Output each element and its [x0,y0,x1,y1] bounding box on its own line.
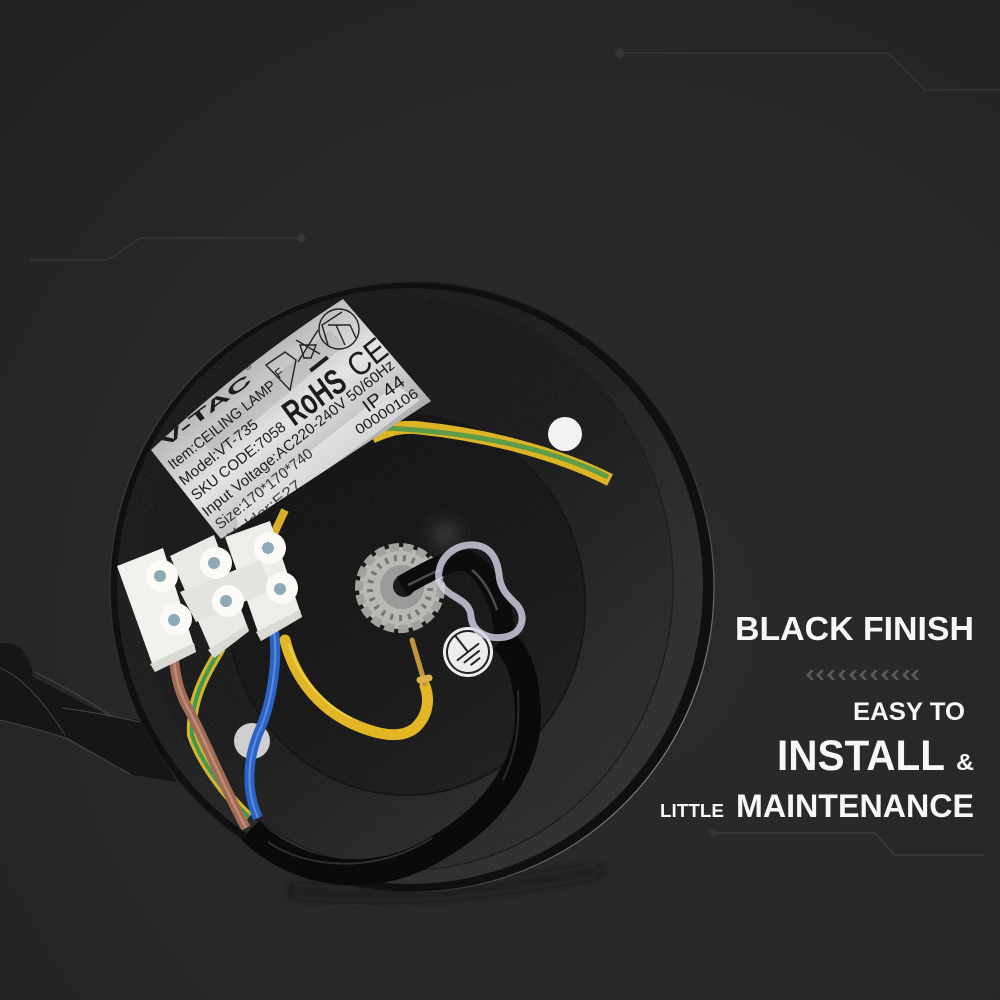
decorative circuit line: left [30,234,305,260]
silver specification label: F [272,365,287,381]
silver specification label: RoHS [275,360,354,433]
silver specification label: V-TAC [157,371,256,451]
earth symbol sticker [439,623,497,681]
silver specification label: SKU CODE:7058 [188,419,289,504]
toothed washer and nut [359,547,441,629]
external black cables [0,643,177,782]
text: easy to: EASY TO [853,698,965,726]
silver specification label: IP 44 [358,371,409,416]
ground wire [285,640,429,735]
text: little maintenance: MAINTENANCE [736,788,974,824]
upper yellow-green earth wire [270,427,610,542]
silver specification label: 00000106 [352,385,421,438]
mains wires [174,632,275,828]
silver specification label [151,299,431,546]
chevron divider [806,670,919,680]
decorative circuit line: bottom right [709,829,985,855]
silver specification label: Item:CEILING LAMP [165,377,280,473]
decorative circuit line: top right [615,48,1000,90]
heading: black finish: BLACK FINISH [735,610,974,647]
clear plastic grommet [439,545,522,638]
metal disc [110,282,714,892]
silver specification label: Model:VT-735 [176,416,262,489]
text: install &: INSTALL [777,732,945,780]
silver specification label: Holder:E27 [224,477,305,546]
silver specification label: Input Voltage:AC220-240V 50/60Hz [199,357,398,520]
white sticker dots [234,417,582,759]
silver specification label: ® [242,360,254,373]
white terminal blocks [117,521,302,672]
certification icons [266,309,359,390]
silver specification label: CE [340,330,395,385]
text: little maintenance: LITTLE [660,801,724,821]
black power cable [250,561,528,872]
base shadow and reflection [225,870,600,980]
silver specification label: Size:170*170*740 [212,445,316,533]
lamp base photo illustration [0,282,715,903]
text: install &: & [956,749,974,775]
